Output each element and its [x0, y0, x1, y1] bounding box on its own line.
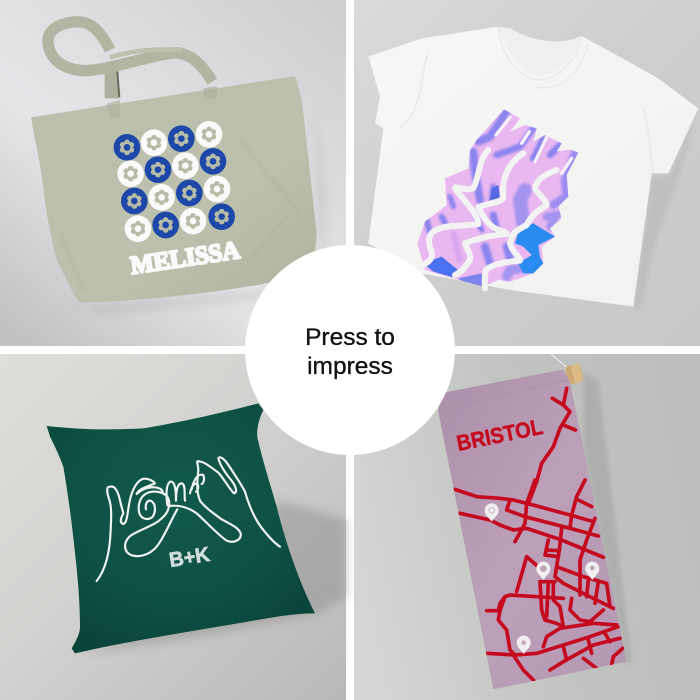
- city road map lines: [455, 388, 623, 682]
- map pins: [485, 503, 599, 654]
- heading: Press to impress: Press to: [305, 324, 395, 351]
- hanging string: [550, 353, 568, 368]
- heading: Press to impress: impress: [307, 353, 393, 380]
- tote bag product: [31, 22, 325, 313]
- t-shirt product: [368, 27, 698, 310]
- title: BRISTOL: BRISTOL: [454, 414, 545, 456]
- pinky promise line drawing: [97, 457, 280, 581]
- holographic MAMA print: [418, 110, 578, 292]
- panel: tote bag: [0, 0, 346, 346]
- hanging banner product: [438, 353, 632, 689]
- panel: t-shirt: [354, 0, 700, 346]
- panel: tea towel map: [354, 353, 700, 700]
- panel: cushion: [0, 354, 347, 700]
- center badge: [245, 245, 455, 455]
- wooden dowel: [565, 363, 584, 385]
- monogram: B+K: B+K: [168, 543, 211, 572]
- cushion product: [47, 403, 347, 655]
- name text: MELISSA: MELISSA: [129, 236, 242, 280]
- flower pattern: 16 discs: [114, 121, 235, 242]
